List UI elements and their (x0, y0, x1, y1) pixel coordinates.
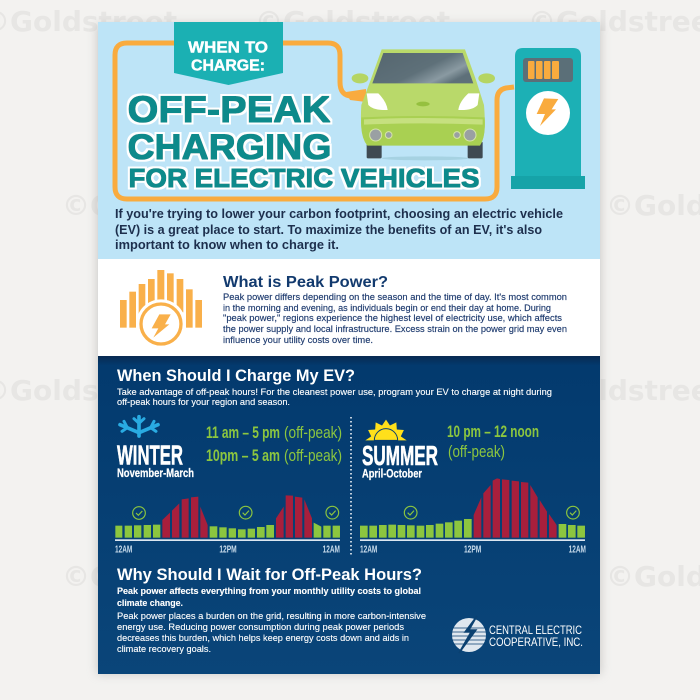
winter bar chart (115, 495, 340, 555)
panel: when to charge and why (98, 356, 600, 674)
summer off-peak hours: (off-peak) (448, 442, 505, 461)
summer label (362, 440, 438, 480)
winter off-peak hours: (off-peak) (284, 446, 342, 465)
why wait body text (117, 611, 426, 654)
when to charge body text: Take advantage of off-peak hours! For the cleanest power use, program your EV to charge at night during (117, 387, 552, 397)
when to charge body text: off-peak hours for your region and season. (117, 397, 290, 407)
peak power body text: Peak power differs depending on the season and the time of day. It's most common (223, 292, 567, 303)
icon: sun (365, 420, 407, 440)
watermark text: ©Goldstreet (255, 5, 450, 38)
intro text: If you're trying to lower your carbon footprint, choosing an electric vehicle (115, 207, 563, 221)
cable plug (346, 89, 366, 102)
title (128, 89, 480, 193)
winter label: November-March (117, 466, 194, 480)
heading: what is peak power: What is Peak Power? (223, 274, 388, 291)
divider (350, 417, 352, 556)
why wait lead text: climate change. (117, 598, 183, 608)
heading: when should I charge: When Should I Charge My EV? (117, 366, 355, 385)
intro text: important to know when to charge it. (115, 238, 339, 252)
icon: snowflake (120, 417, 158, 436)
winter off-peak hours: (off-peak) (284, 423, 342, 442)
ribbon: when to charge: WHEN TO (188, 40, 268, 56)
logo: central electric cooperative: COOPERATIVE, INC. (489, 635, 583, 649)
icon: charging station (511, 48, 585, 189)
peak power body text (223, 292, 567, 346)
panel: header (98, 22, 600, 259)
why wait body text: energy use. Reducing power consumption during peak power periods (117, 622, 404, 632)
icon: electric car (352, 49, 495, 160)
intro text (115, 207, 563, 252)
peak power body text: in the morning and evening, as individuals begin or end their day at home. During (223, 303, 551, 314)
summer bar chart: 12PM (464, 544, 481, 555)
title: FOR ELECTRIC VEHICLES (128, 165, 480, 193)
heading: why wait: Why Should I Wait for Off-Peak Hours? (117, 565, 422, 584)
title: CHARGING (128, 128, 332, 167)
summer bar chart: 12AM (360, 544, 377, 555)
why wait body text: Peak power places a burden on the grid, resulting in more carbon-intensive (117, 611, 426, 621)
charging cable (115, 43, 514, 199)
ribbon: when to charge (174, 22, 283, 85)
why wait body text: decreases this burden, which helps keep energy costs down and aids in (117, 633, 409, 643)
winter bar chart: 12AM (323, 544, 340, 555)
summer bar chart: 12AM (569, 544, 586, 555)
panel: what is peak power (98, 259, 600, 356)
peak power body text: the power supply and local infrastructure. Excess strain on the power grid may even (223, 324, 567, 335)
summer off-peak hours (447, 422, 539, 461)
title: OFF-PEAK (128, 89, 331, 130)
when to charge body text (117, 387, 552, 407)
summer off-peak hours: 10 pm – 12 noon (447, 422, 539, 441)
winter off-peak hours: 11 am – 5 pm (206, 423, 280, 442)
watermark text: ©Goldstreet (62, 560, 257, 593)
why wait lead text (117, 586, 421, 608)
winter label (117, 440, 194, 480)
winter off-peak hours: 10pm – 5 am (206, 446, 280, 465)
icon: peak power bars (120, 270, 202, 349)
winter label: WINTER (117, 440, 183, 470)
logo: central electric cooperative: CENTRAL ELECTRIC (489, 623, 582, 637)
winter bar chart: 12AM (115, 544, 132, 555)
logo: central electric cooperative (452, 616, 583, 653)
why wait lead text: Peak power affects everything from your monthly utility costs to global (117, 586, 421, 596)
peak power body text: "peak power," regions experience the highest level of electricity use, which affects (223, 313, 562, 324)
winter bar chart: 12PM (219, 544, 237, 555)
summer label: April-October (362, 466, 422, 480)
winter off-peak hours (206, 423, 342, 465)
summer label: SUMMER (362, 440, 438, 471)
intro text: (EV) is a great place to start. To maximize the benefits of an EV, it's also (115, 223, 542, 237)
peak power body text: influence your utility costs over time. (223, 335, 373, 346)
summer bar chart (360, 478, 586, 555)
ribbon: when to charge: CHARGE: (191, 58, 265, 74)
why wait body text: climate recovery goals. (117, 644, 211, 654)
watermark text: ©Goldstreet (62, 189, 257, 222)
